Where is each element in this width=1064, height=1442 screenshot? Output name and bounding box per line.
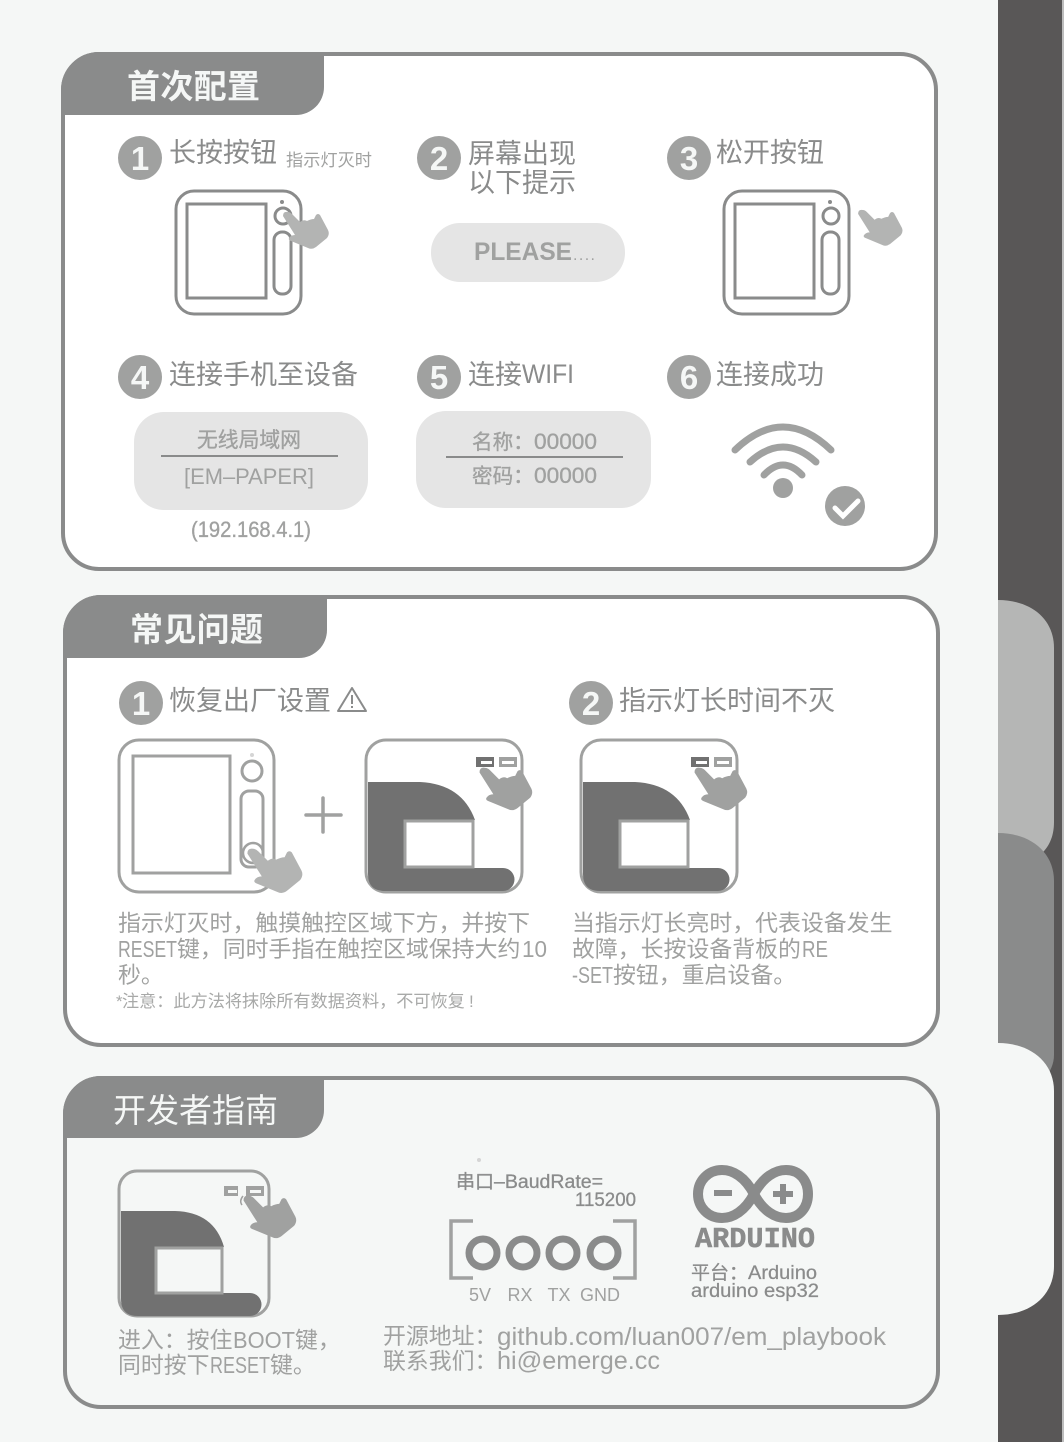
body text: item 2: 当指示灯长亮时，代表设备发生 (572, 910, 892, 936)
step 6: 6 (680, 359, 698, 396)
body text: item 1: 键，同时手指在触控区域保持大约 (177, 936, 520, 962)
text: boot instructions: 键， (295, 1327, 341, 1353)
platform text: 平台： (691, 1262, 748, 1284)
step 1 (118, 136, 372, 180)
links: github.com/luan007/em_playbook (497, 1323, 887, 1351)
icon: wifi connected (735, 427, 865, 526)
pill: 无线局域网 (134, 412, 368, 510)
step 1: 长按按钮 (169, 138, 277, 168)
arduino logo (695, 1170, 815, 1256)
heading: 开发者指南 (63, 1076, 324, 1138)
serial pins: GND (580, 1285, 620, 1305)
step 2: 屏幕出现 (468, 139, 576, 169)
body text: item 1: 注意：此方法将抹除所有数据资料，不可恢复 (122, 991, 465, 1011)
tab: mid (998, 833, 1054, 1080)
body text: item 1: 秒。 (118, 962, 164, 988)
body text: item 1: 10 (522, 936, 547, 962)
heading: 首次配置: 首次配置 (127, 68, 260, 105)
body text: item 1 (116, 910, 547, 1011)
links: 开源地址： (383, 1323, 497, 1349)
serial baud rate (456, 1158, 636, 1211)
panel: 首次配置 (61, 52, 936, 569)
device back right (581, 740, 747, 892)
step 2: 2 (430, 140, 448, 177)
item 1 heading: 恢复出厂设置 (169, 686, 331, 716)
pill: wifi credentials (416, 411, 651, 508)
step 4 (118, 355, 358, 399)
arduino logo: ARDUINO (695, 1223, 815, 1256)
sidebar (998, 0, 1064, 1442)
step 2 (417, 136, 576, 198)
pill: 无线局域网: [EM–PAPER] (184, 464, 314, 489)
panel: 常见问题 (63, 595, 938, 1045)
serial baud rate: 串口 (456, 1171, 494, 1193)
tab: active (998, 1043, 1054, 1315)
tab: light (998, 600, 1054, 860)
device back (366, 740, 532, 892)
body text: item 2: -SET (572, 962, 613, 988)
serial pins (451, 1221, 635, 1305)
links (383, 1323, 887, 1375)
platform text: Arduino (748, 1263, 817, 1284)
pill: wifi credentials: 00000 (534, 429, 597, 454)
text: boot instructions: BOOT (233, 1327, 295, 1353)
step 5: WIFI (522, 359, 574, 389)
pill: wifi credentials: 00000 (534, 463, 597, 488)
step 2: 以下提示 (468, 168, 576, 198)
body text: item 1: 指示灯灭时，触摸触控区域下方，并按下 (118, 910, 530, 936)
icon: warning (338, 688, 366, 711)
step 5 (417, 355, 574, 399)
step 1: 1 (131, 140, 149, 177)
device with finger released (724, 191, 903, 314)
links: 联系我们： (383, 1348, 497, 1374)
text: boot instructions: 同时按下 (118, 1352, 210, 1378)
serial baud rate: 115200 (575, 1190, 636, 1211)
step 4: 连接手机至设备 (169, 360, 358, 390)
heading: 常见问题 (63, 595, 327, 658)
platform text (691, 1262, 819, 1302)
body text: item 2 (572, 910, 892, 988)
pill: PLEASE (431, 223, 625, 282)
text: boot instructions: RESET (210, 1352, 270, 1378)
pill: wifi credentials: 名称： (472, 431, 534, 454)
serial baud rate: –BaudRate= (494, 1172, 603, 1193)
pill: 无线局域网: 无线局域网 (197, 429, 301, 452)
serial pins: TX (547, 1285, 571, 1305)
text: boot instructions (118, 1327, 341, 1378)
pill: wifi credentials: 密码： (472, 465, 534, 488)
step 5: 连接 (468, 360, 522, 390)
body text: item 1: ! (469, 992, 474, 1011)
plus sign (306, 798, 341, 832)
pill: PLEASE: PLEASE (474, 238, 572, 266)
item 2 heading: 2 (582, 685, 600, 722)
body text: item 1: RESET (118, 936, 177, 962)
body text: item 2: RE (802, 936, 828, 962)
body text: item 2: 按钮，重启设备。 (613, 962, 796, 988)
heading: 开发者指南: 开发者指南 (113, 1092, 278, 1129)
step 4: 4 (131, 359, 150, 396)
text: boot instructions: 键。 (270, 1352, 316, 1378)
pill: PLEASE: .... (573, 247, 595, 264)
item 2 heading (569, 681, 835, 725)
device with finger on button (176, 191, 329, 314)
heading: 首次配置 (61, 52, 324, 115)
body text: item 1: * (116, 992, 123, 1011)
ip address: (192.168.4.1) (191, 517, 311, 542)
step 6 (667, 355, 824, 399)
step 1: 指示灯灭时 (286, 150, 372, 170)
step 3 (667, 136, 824, 180)
step 3: 松开按钮 (716, 138, 824, 168)
step 3: 3 (680, 140, 698, 177)
panel: 开发者指南 (63, 1076, 938, 1407)
platform text: arduino esp32 (691, 1281, 819, 1302)
serial pins: 5V (469, 1285, 491, 1305)
step 5: 5 (430, 359, 448, 396)
device back: boot (119, 1171, 296, 1316)
device front with touch (119, 740, 302, 893)
item 1 heading (119, 681, 331, 725)
heading: 常见问题: 常见问题 (130, 611, 263, 648)
text: boot instructions: 进入：按住 (118, 1327, 233, 1353)
serial pins: RX (507, 1285, 533, 1305)
step 6: 连接成功 (716, 360, 824, 390)
item 1 heading: 1 (132, 685, 150, 722)
item 2 heading: 指示灯长时间不灭 (619, 686, 835, 716)
body text: item 2: 故障，长按设备背板的 (572, 936, 801, 962)
links: hi@emerge.cc (497, 1347, 660, 1375)
